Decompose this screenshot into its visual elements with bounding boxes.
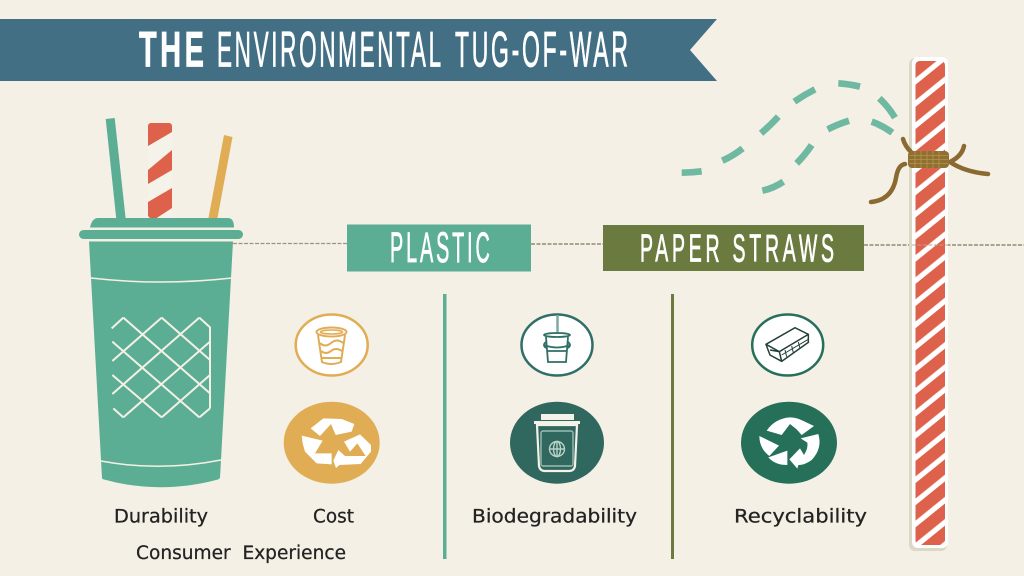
- icon: green recycling badge: [741, 402, 837, 484]
- title banner: [0, 19, 717, 81]
- icon: cup with straws: [79, 118, 243, 487]
- orange straw: [208, 135, 232, 219]
- cup lattice pattern: [112, 318, 210, 417]
- divider: plastic column: [443, 294, 446, 559]
- label: durability: Durability: [114, 506, 208, 528]
- icon: large striped paper straw: [909, 57, 948, 551]
- cup body: [89, 242, 233, 487]
- cup lid: [90, 218, 234, 228]
- label: cost: Cost: [313, 506, 354, 528]
- title text: THE: [139, 21, 204, 78]
- dashed path: teal flight trail: [682, 83, 895, 191]
- label: consumer experience: Consumer Experience: [136, 543, 346, 564]
- striped straw: [148, 123, 172, 218]
- label: biodegradability: Biodegradability: [472, 506, 637, 528]
- title text: TUG-OF-WAR: [455, 23, 628, 78]
- label: paper straws: PAPER STRAWS: [640, 226, 834, 270]
- icon: twine knot: [871, 139, 988, 202]
- green straw: [106, 118, 126, 219]
- divider: paper column: [671, 294, 674, 559]
- icon: compost bin badge: [510, 402, 604, 484]
- cup rim: [79, 230, 243, 239]
- label: plastic: PLASTIC: [390, 225, 490, 272]
- label: recyclability: Recyclability: [734, 506, 867, 528]
- connector lines: [233, 244, 1024, 245]
- title text: [139, 21, 628, 78]
- title text: ENVIRONMENTAL: [217, 23, 441, 78]
- label: plastic: [347, 224, 531, 272]
- icon: brick badge: [752, 314, 823, 376]
- icon: cost cup badge: [296, 314, 368, 376]
- icon: orange recycling badge: [284, 402, 380, 484]
- icon: teal cup with straw badge: [522, 314, 592, 376]
